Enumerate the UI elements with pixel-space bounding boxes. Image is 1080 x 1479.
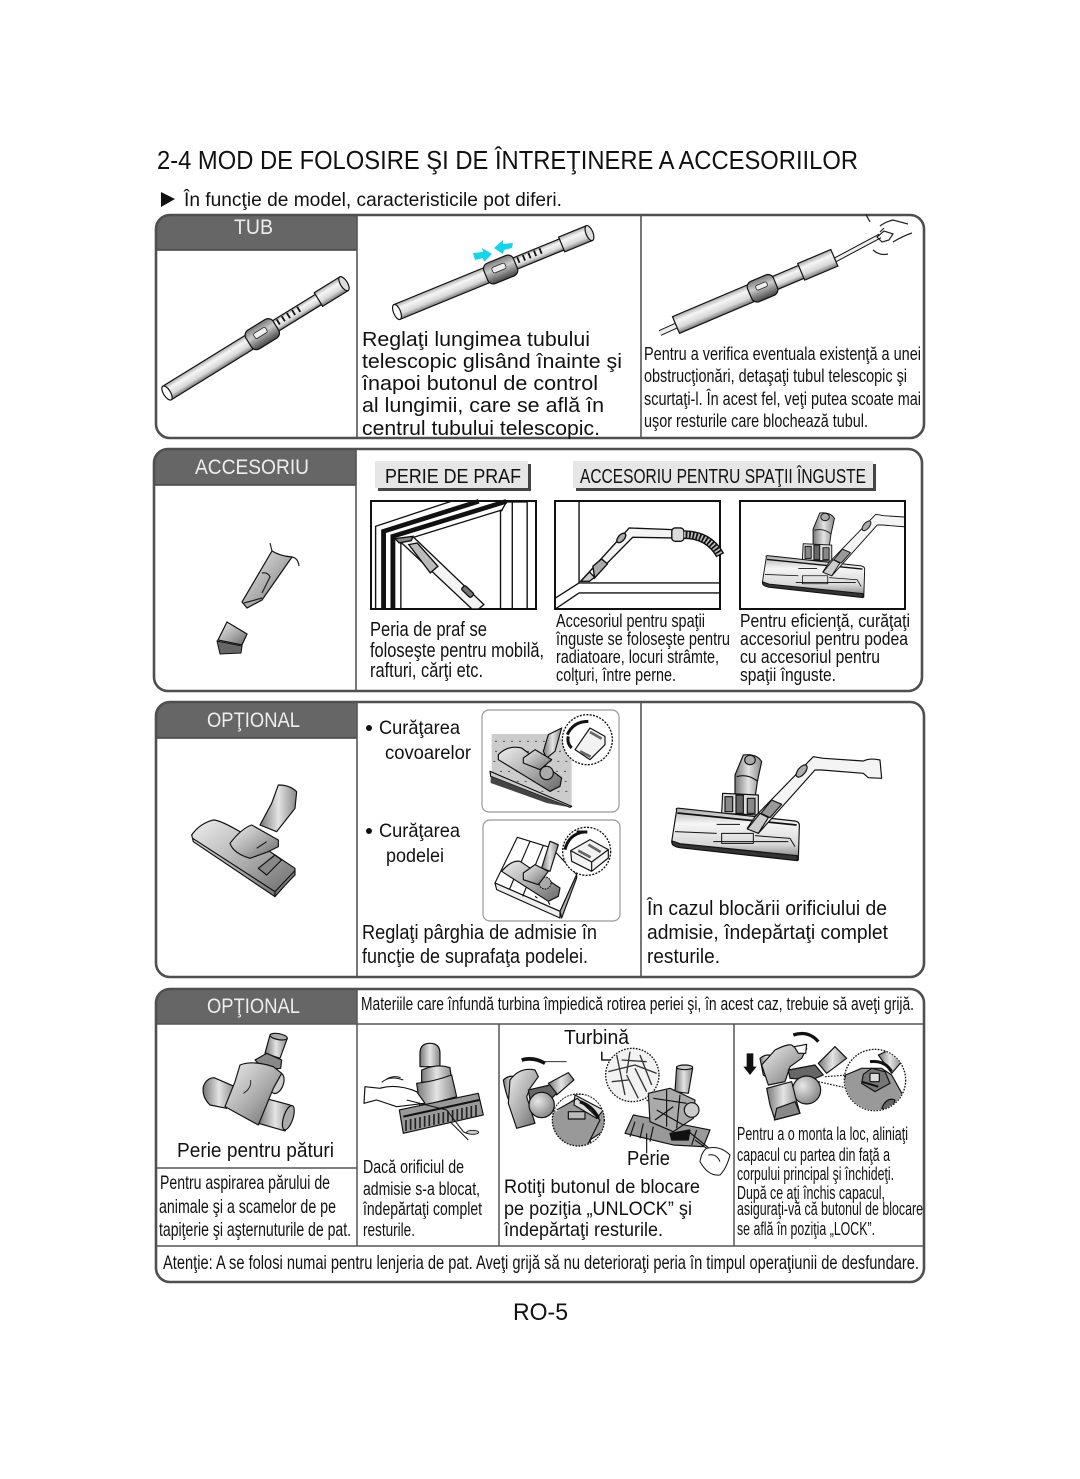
label: perie de praf (375, 461, 531, 491)
text: check for blockage: scurtaţi-l. În acest fel, veţi putea scoate mai (644, 388, 921, 409)
text: rotate lock button: pe poziţia „UNLOCK” şi (504, 1198, 692, 1220)
text: crevice tool usage: Accesoriul pentru spaţii (556, 610, 705, 631)
list item: floor cleaning: Curăţarea (379, 820, 460, 842)
text: dust brush usage: Peria de praf se (370, 619, 487, 641)
illustration: removing debris by hand (364, 1043, 483, 1140)
text: turbine warning: Materiile care înfundă turbina împiedică rotirea periei şi, în acest caz, trebuie să aveţi grijă. (361, 993, 914, 1014)
panel: tub (156, 214, 924, 440)
illustration: floor setting (483, 820, 620, 921)
illustration: tube being cleared by hand (660, 214, 912, 335)
illustration: turbo brush (203, 1032, 297, 1131)
panel: optional turbo brush (156, 989, 924, 1282)
text: check for blockage: uşor resturile care blochează tubul. (644, 410, 868, 431)
illustration: reassembling turbo brush (743, 1033, 908, 1120)
text: if intake is blocked: resturile. (363, 1219, 415, 1240)
text: efficiency tip: cu accesoriul pentru (740, 646, 880, 667)
label: accesoriu pentru spatii inguste: ACCESORIU PENTRU SPAŢII ÎNGUSTE (580, 465, 866, 488)
text: if intake is blocked: îndepărtaţi complet (362, 1198, 482, 1219)
text: hair and lint: Pentru aspirarea părului de (160, 1172, 330, 1194)
illustration: crevice tool and dust brush (217, 543, 299, 654)
text: adjust tube length: al lungimii, care se află în (362, 394, 604, 417)
text: reassembly instructions: corpului principal şi închideţi. (737, 1163, 894, 1184)
text: dust brush usage (370, 619, 544, 682)
text: dust brush usage: foloseşte pentru mobilă, (370, 640, 544, 662)
label: blanket brush: Perie pentru pături (177, 1139, 334, 1162)
heading: optional: OPŢIONAL (207, 709, 300, 732)
text: crevice tool usage: radiatoare, locuri strâmte, (556, 646, 719, 667)
text: efficiency tip: spaţii înguste. (740, 664, 836, 685)
text: hair and lint (159, 1172, 351, 1241)
text: dust brush usage: rafturi, cărţi etc. (370, 660, 483, 682)
page number: RO-5 (513, 1299, 568, 1326)
title: 2-4 MOD DE FOLOSIRE ŞI DE ÎNTREŢINERE A ACCESORIILOR (157, 146, 858, 175)
text: adjust tube length: telescopic glisând înainte şi (362, 350, 622, 373)
illustration: unlocking and removing turbine debris (503, 1048, 730, 1175)
text: if intake is blocked: admisie s-a blocat, (363, 1178, 480, 1199)
label: accesoriu pentru spatii inguste (573, 461, 876, 491)
text: check for blockage: Pentru a verifica eventuala existenţă a unei (644, 343, 921, 364)
list item: floor cleaning (366, 820, 460, 867)
text: adjust tube length: Reglaţi lungimea tubului (362, 328, 590, 351)
text: adjust intake lever (362, 921, 597, 968)
text: crevice tool usage: înguste se foloseşte pentru (555, 628, 730, 649)
list item: carpet cleaning: Curăţarea (379, 717, 460, 739)
text: adjust intake lever: Reglaţi pârghia de admisie în (362, 921, 597, 944)
heading: tub: TUB (234, 216, 273, 239)
text: check for blockage: obstrucţionări, detaşaţi tubul telescopic şi (644, 365, 907, 386)
text: reassembly instructions: Pentru a o monta la loc, aliniaţi (737, 1123, 908, 1144)
text: rotate lock button (503, 1176, 700, 1241)
text: crevice tool usage (555, 610, 730, 685)
illustration: tube with slide arrows (390, 222, 597, 324)
text: hair and lint: tapiţerie şi aşternuturile de pat. (159, 1219, 351, 1241)
text: efficiency tip (740, 610, 910, 685)
text: efficiency tip: accesoriul pentru podea (740, 628, 909, 649)
illustration: telescopic tube (158, 273, 353, 404)
illustration: cleaning floor accessory (739, 500, 906, 610)
text: adjust intake lever: funcţie de suprafaţa podelei. (362, 945, 588, 968)
text: reassembly instructions: capacul cu partea din faţă a (737, 1144, 890, 1165)
label: perie de praf: PERIE DE PRAF (385, 465, 521, 488)
text: hair and lint: animale şi a scamelor de pe (159, 1196, 336, 1218)
text: blocked intake: În cazul blocării orificiului de (646, 897, 887, 920)
text: if intake is blocked: Dacă orificiul de (363, 1156, 464, 1177)
label: brush: Perie (627, 1148, 670, 1170)
list item: carpet cleaning (366, 717, 471, 764)
panel: accesoriu (154, 449, 931, 691)
text: efficiency tip: Pentru eficienţă, curăţaţi (740, 610, 910, 631)
text: adjust tube length (361, 328, 622, 440)
text: crevice tool usage: colţuri, între perne. (556, 664, 676, 685)
heading: accesoriu: ACCESORIU (195, 456, 309, 479)
infographic page (152, 146, 926, 1320)
label: turbine: Turbină (564, 1026, 630, 1049)
illustration: floor brush (192, 785, 297, 897)
text: rotate lock button: Rotiţi butonul de blocare (504, 1176, 700, 1198)
text: reassembly instructions (737, 1123, 923, 1239)
illustration: crevice tool on radiator corner (555, 501, 721, 609)
text: blocked intake: resturile. (647, 945, 720, 968)
list item: carpet cleaning: covoarelor (385, 742, 471, 764)
text: blocked intake: admisie, îndepărtaţi complet (647, 921, 888, 944)
note: features vary by model: În funcţie de model, caracteristicile pot diferi. (183, 188, 562, 211)
text: adjust tube length: centrul tubului telescopic. (362, 417, 600, 440)
label: turbine (564, 1026, 637, 1060)
illustration: dust brush on furniture (371, 501, 536, 609)
text: adjust tube length: înapoi butonul de control (361, 372, 598, 395)
panel: optional floor brush (156, 702, 924, 977)
text: blocked intake (646, 897, 888, 968)
text: rotate lock button: îndepărtaţi resturile. (503, 1219, 663, 1241)
text: reassembly instructions: se află în poziţia „LOCK”. (737, 1218, 875, 1239)
text: reassembly instructions: După ce aţi închis capacul, (737, 1182, 885, 1203)
text: check for blockage (644, 343, 921, 431)
illustration: carpet setting (482, 710, 619, 812)
text: reassembly instructions: asiguraţi-vă că butonul de blocare (737, 1198, 923, 1219)
heading: optional: OPŢIONAL (207, 995, 300, 1018)
illustration: clearing floor brush (672, 755, 882, 861)
text: if intake is blocked (362, 1156, 482, 1240)
list item: floor cleaning: podelei (386, 845, 444, 867)
